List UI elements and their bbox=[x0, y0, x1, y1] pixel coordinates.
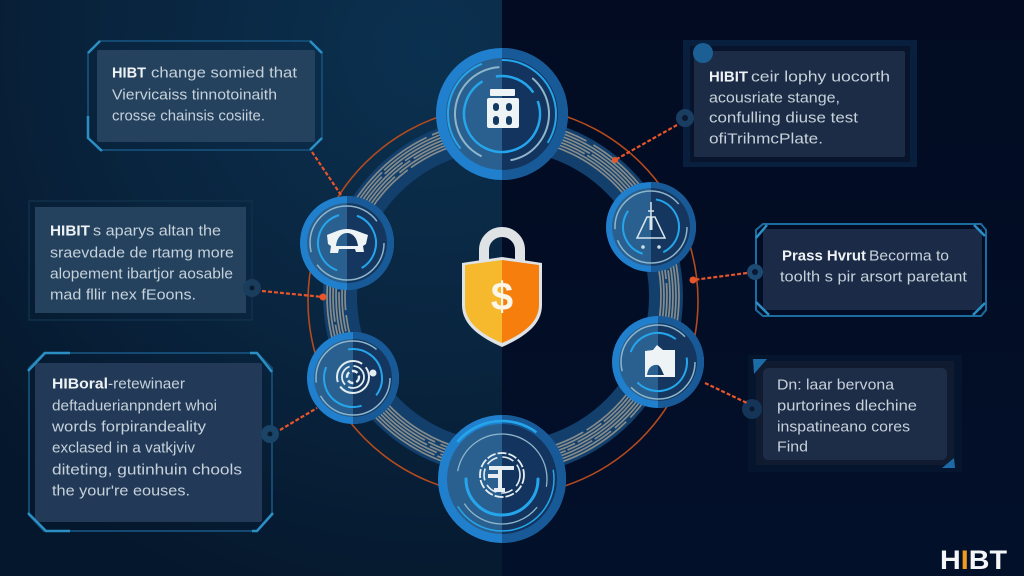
icon: globe bbox=[480, 453, 524, 497]
node: upper right, warning bell icon bbox=[606, 182, 696, 272]
node: upper left, arch icon bbox=[300, 196, 394, 290]
text block bbox=[709, 68, 890, 148]
panel corners bbox=[88, 41, 322, 151]
connector: middle right panel to node bbox=[690, 264, 763, 284]
connector: bottom left panel to node bbox=[261, 408, 317, 443]
text block: Becorma to bbox=[869, 248, 949, 264]
panel corners bbox=[28, 353, 273, 531]
text block: s aparys altan the bbox=[93, 222, 221, 240]
connector: top right panel to node bbox=[612, 109, 694, 163]
icon: box bbox=[645, 345, 675, 377]
logo: HIBT: HIBT bbox=[940, 545, 1008, 575]
text block: purtorines dlechine bbox=[777, 398, 917, 414]
icon: swirl bbox=[337, 361, 376, 393]
text block bbox=[51, 376, 242, 500]
text block bbox=[777, 376, 917, 456]
text block: crosse chainsis cosiite. bbox=[112, 108, 265, 124]
text block: HIBIT bbox=[50, 222, 90, 240]
background: right half bbox=[502, 0, 1024, 576]
text block: acousriate stange, bbox=[709, 90, 840, 106]
text block: -retewinaer bbox=[108, 376, 185, 392]
dollar sign: $ bbox=[491, 275, 513, 319]
text block: toolth s pir arsort paretant bbox=[780, 268, 968, 286]
icon: arch bbox=[327, 229, 368, 253]
panel: top right bbox=[683, 40, 917, 167]
central ring band bbox=[327, 120, 679, 472]
connector: bottom right panel to node bbox=[705, 383, 762, 419]
panel: middle right bbox=[756, 224, 986, 316]
corner accents bbox=[753, 359, 955, 468]
text block: mad fllir nex fEoons. bbox=[50, 286, 196, 304]
padlock shackle bbox=[484, 232, 520, 262]
corner blob bbox=[693, 43, 713, 63]
text block bbox=[780, 248, 968, 286]
text block: HIBIT bbox=[709, 68, 748, 86]
shield left half bbox=[465, 260, 502, 343]
text block bbox=[50, 222, 234, 304]
text block: alopement ibartjor aosable bbox=[50, 266, 233, 282]
text block: change somied that bbox=[151, 64, 298, 82]
text block: the your're eouses. bbox=[52, 482, 190, 500]
node: top, building icon bbox=[436, 48, 568, 180]
node: bottom, globe icon bbox=[420, 397, 584, 561]
text block: confulling diuse test bbox=[709, 110, 859, 126]
connector: top left panel to node bbox=[312, 152, 341, 195]
text block: diteting, gutinhuin chools bbox=[52, 462, 242, 478]
text block: ofiTrihmcPlate. bbox=[709, 130, 823, 148]
panel: top left bbox=[88, 41, 322, 151]
text block: deftaduerianpndert whoi bbox=[52, 398, 217, 414]
text block: Prass Hvrut bbox=[782, 248, 866, 264]
panel corners bbox=[756, 225, 985, 315]
icon: bell bbox=[637, 202, 665, 248]
text block: HIBoral bbox=[52, 376, 108, 392]
text block: exclased in a vatkjviv bbox=[52, 440, 195, 456]
panel: middle left bbox=[29, 201, 252, 320]
text block: Viervicaiss tinnotoinaith bbox=[112, 86, 277, 104]
text block: ceir lophy uocorth bbox=[751, 68, 890, 86]
text block: sraevdade de rtamg more bbox=[50, 244, 234, 262]
background: left half bbox=[0, 0, 502, 576]
panel: bottom left bbox=[28, 353, 273, 531]
text block: HIBT bbox=[112, 64, 146, 82]
panel: bottom right bbox=[748, 355, 962, 472]
text block bbox=[112, 64, 298, 124]
connector: middle left panel to node bbox=[243, 279, 326, 300]
shield outline bbox=[462, 257, 542, 347]
node: lower left, swirl icon bbox=[307, 332, 399, 424]
icon: building bbox=[487, 89, 519, 128]
icon: padlock shield bbox=[462, 232, 542, 347]
shield right half bbox=[502, 260, 539, 343]
text block: words forpirandeality bbox=[51, 418, 207, 436]
node: lower right, box icon bbox=[612, 316, 704, 408]
text block: inspatineano cores bbox=[777, 418, 910, 436]
orange orbit ring bbox=[308, 106, 698, 496]
text block: Find bbox=[777, 438, 808, 456]
text block: Dn: laar bervona bbox=[777, 376, 895, 394]
